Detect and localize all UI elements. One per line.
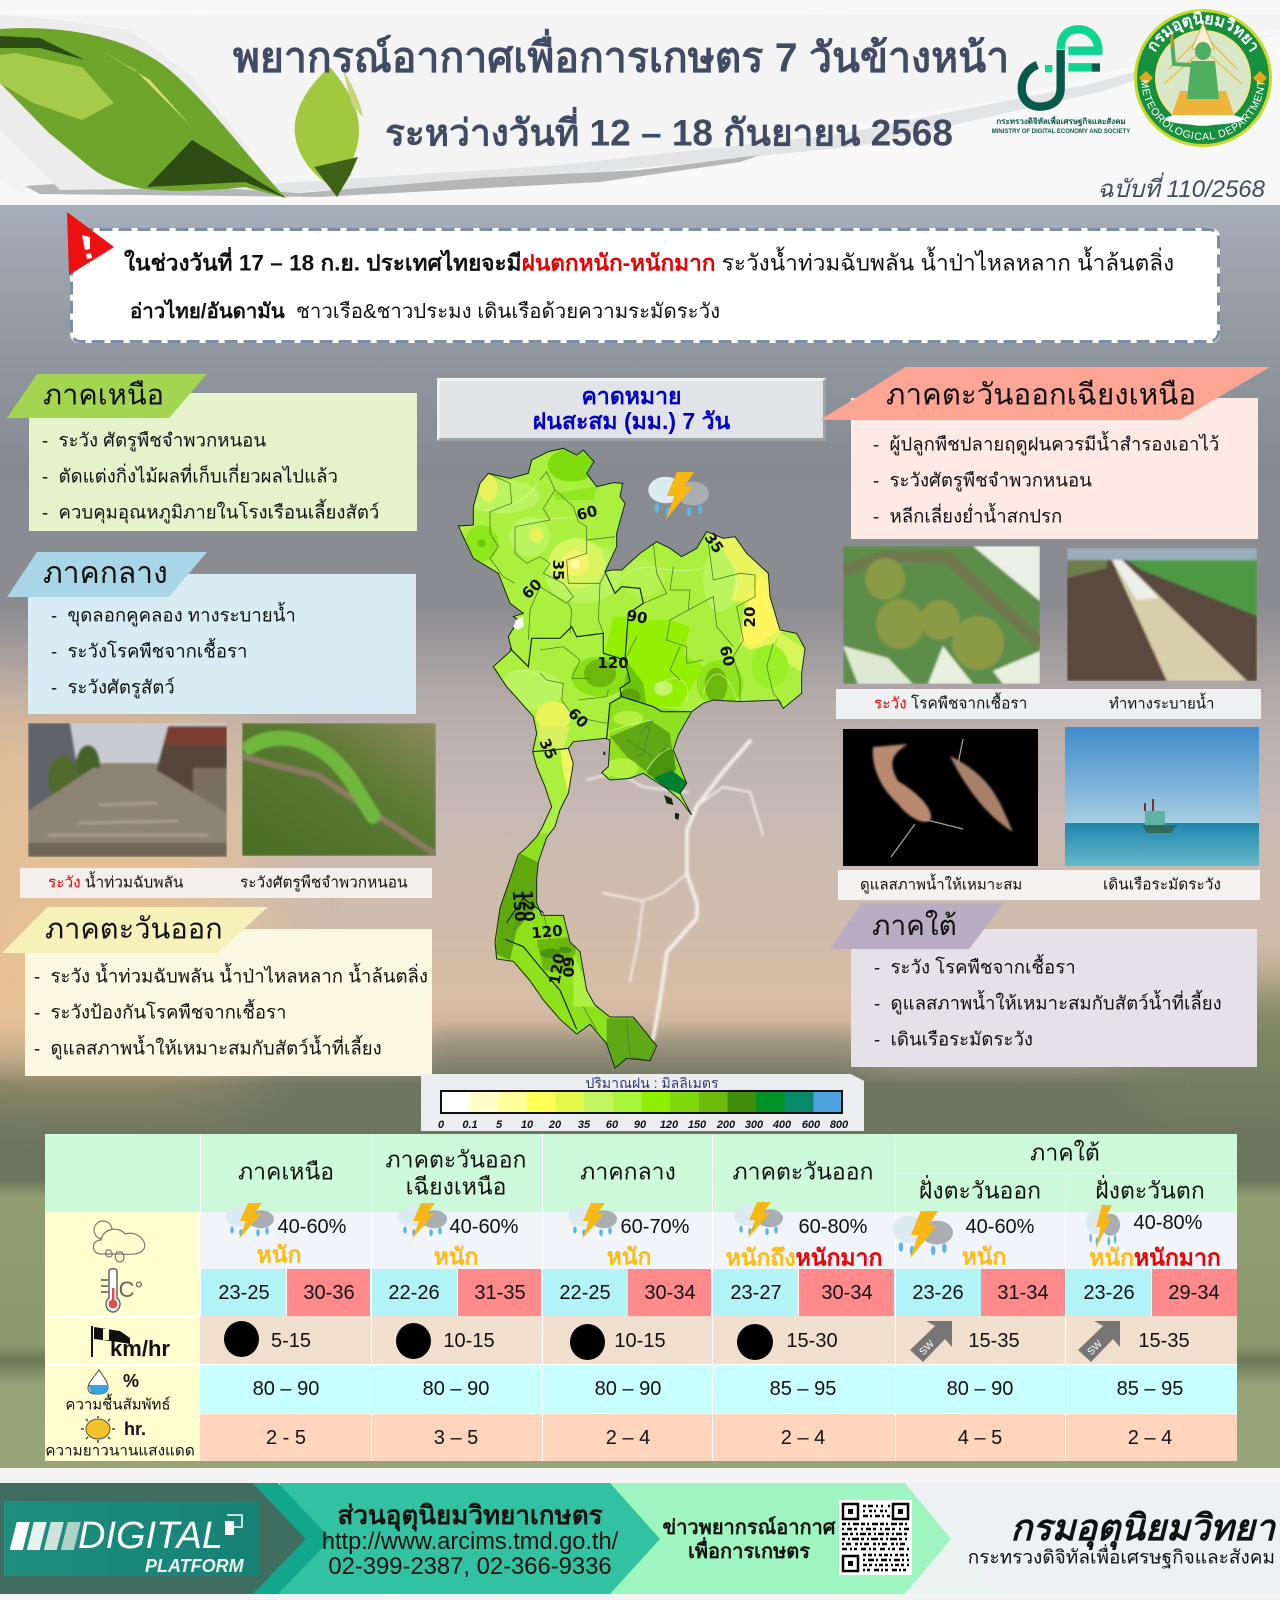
digital platform badge (4, 1501, 260, 1576)
photo: catfish (843, 729, 1038, 866)
panel: south region (851, 929, 1257, 1067)
table header row: เฉียงเหนือ (406, 1174, 506, 1200)
temperature row: 31-34 (997, 1282, 1049, 1304)
contour labels: 120 (531, 922, 563, 942)
icon: cloud sun rain outline (92, 1220, 146, 1263)
contour labels: 20 (741, 607, 759, 627)
legend scale labels: 90 (634, 1119, 647, 1131)
heading: rainfall map title (437, 378, 826, 441)
logo: ministry of digital economy: กระทรวงดิจิทัลเพื่อเศรษฐกิจและสังคม (996, 117, 1126, 126)
heading: rainfall map title: คาดหมาย (582, 383, 681, 409)
rain chance row: 60-80% (799, 1216, 867, 1238)
digital platform badge: DIGITAL (78, 1515, 223, 1557)
rain chance row (200, 1212, 1237, 1269)
wind row: 15-35 (968, 1330, 1020, 1352)
contour labels: 60 (716, 644, 738, 668)
photo: caterpillar on branch (242, 723, 436, 856)
rain chance row: 40-60% (278, 1216, 346, 1238)
temperature row: 30-34 (644, 1282, 696, 1304)
panel: northeast region (851, 398, 1258, 539)
contour labels: 60 (559, 957, 577, 977)
icon: wind sock with km/hr: km/hr (110, 1336, 170, 1361)
contour labels: 35 (701, 529, 727, 557)
heading tag: central (7, 552, 207, 597)
temperature row: 23-25 (218, 1282, 270, 1304)
humidity row: 80 – 90 (423, 1378, 489, 1400)
logo: ministry of digital economy: MINISTRY OF DIGITAL ECONOMY AND SOCIETY (992, 129, 1130, 135)
caption band: durian and drainage: ระวัง โรคพืชจากเชื้อรา (874, 695, 1027, 712)
wind row: 10-15 (443, 1330, 495, 1352)
caption band: flood and caterpillar (20, 868, 432, 898)
sunshine row: 2 – 4 (781, 1427, 825, 1449)
east advice text: - ระวัง น้ำท่วมฉับพลัน น้ำป่าไหลหลาก น้ำล้นตลิ่ง (34, 966, 428, 987)
caption band: fish and boat (838, 870, 1260, 900)
caption band: durian and drainage (836, 689, 1261, 719)
sunshine row: 3 – 5 (434, 1427, 478, 1449)
contour labels: 150 (509, 890, 529, 922)
photo: fishing boat at sea (1065, 727, 1259, 866)
panel: central region (28, 574, 416, 714)
caption band: flood and caterpillar: ระวังศัตรูพืชจำพวกหนอน (240, 874, 408, 891)
table header row: ภาคเหนือ (238, 1158, 334, 1184)
footer (0, 1468, 1280, 1600)
department name: กรมอุตุนิยมวิทยา (1010, 1507, 1275, 1548)
wind row: 15-30 (786, 1330, 838, 1352)
rain chance row: 40-60% (450, 1216, 518, 1238)
heading tag: north: ภาคเหนือ (43, 380, 164, 412)
humidity row: 85 – 95 (770, 1378, 836, 1400)
logo: ministry of digital economy (992, 25, 1130, 135)
humidity row: 80 – 90 (595, 1378, 661, 1400)
rain chance row: 60-70% (621, 1216, 689, 1238)
icon: thermometer: C° (119, 1277, 143, 1302)
forecast table (45, 1134, 1237, 1461)
east advice text: - ระวังป้องกันโรคพืชจากเชื้อรา (34, 1002, 286, 1023)
wind row: SW (918, 1338, 937, 1358)
legend scale labels: 10 (521, 1119, 534, 1131)
east advice text (34, 962, 428, 1060)
central advice text: - ระวังโรคพืชจากเชื้อรา (51, 641, 247, 662)
temperature row: 22-26 (388, 1282, 440, 1304)
legend title: ปริมาณฝน : มิลลิเมตร (586, 1075, 718, 1091)
heading tag: east: ภาคตะวันออก (45, 914, 223, 946)
temperature row (201, 1269, 1237, 1316)
table header row: ภาคกลาง (580, 1158, 676, 1184)
legend scale labels: 20 (548, 1119, 562, 1131)
sunshine row: 4 – 5 (958, 1427, 1002, 1449)
table header row: ภาคใต้ (1030, 1140, 1100, 1166)
logo: meteorological department seal: กรมอุตุนิยมวิทยา (1148, 11, 1257, 52)
icon: humidity drop label: ความชื้นสัมพัทธ์ (65, 1396, 171, 1414)
legend scale labels: 300 (745, 1119, 764, 1131)
icon: wind sock with km/hr (91, 1326, 170, 1361)
division name and contacts: 02-399-2387, 02-366-9336 (328, 1553, 612, 1580)
east advice text: - ดูแลสภาพน้ำให้เหมาะสมกับสัตว์น้ำที่เลี้ยง (34, 1038, 382, 1059)
heading tag: south: ภาคใต้ (872, 910, 957, 941)
contour labels: 120 (597, 654, 629, 672)
contour labels: 60 (564, 704, 592, 732)
photo: drainage ditch (1067, 548, 1257, 681)
table header row (45, 1134, 1237, 1212)
legend scale labels: 200 (716, 1119, 736, 1131)
central advice text: - ระวังศัตรูสัตว์ (51, 677, 175, 698)
logo: meteorological department seal: METEOROLOGICAL DEPARTMENT (1141, 80, 1265, 140)
south advice text: - ระวัง โรคพืชจากเชื้อรา (874, 957, 1076, 978)
legend scale labels: 150 (688, 1119, 707, 1131)
temperature row: 30-36 (303, 1282, 355, 1304)
division name and contacts: ส่วนอุตุนิยมวิทยาเกษตร (337, 1500, 603, 1530)
caption band: durian and drainage: ทำทางระบายน้ำ (1109, 696, 1214, 712)
table header row: ภาคตะวันออก (386, 1146, 526, 1172)
table header row: ฝั่งตะวันออก (919, 1178, 1041, 1204)
photo: durian fruit (843, 546, 1040, 684)
contour labels (509, 502, 759, 986)
icon: sunshine duration label: ความยาวนานแสงแดด (45, 1442, 195, 1459)
agro weather news label: เพื่อการเกษตร (688, 1541, 810, 1563)
rain chance row: หนัก (434, 1244, 478, 1270)
sunshine row (200, 1414, 1237, 1461)
wind row (200, 1316, 1237, 1364)
agro weather news label (663, 1516, 836, 1563)
rain chance row: หนัก (962, 1244, 1006, 1270)
digital platform badge: PLATFORM (145, 1556, 244, 1576)
rain chance row: หนักถึงหนักมาก (726, 1244, 882, 1270)
temperature row: 23-26 (912, 1282, 964, 1304)
contour labels: 60 (575, 502, 599, 524)
contour labels: 90 (625, 606, 649, 628)
humidity row: 85 – 95 (1117, 1378, 1183, 1400)
northeast advice text: - หลีกเลี่ยงย่ำน้ำสกปรก (873, 506, 1062, 527)
panel: east region (25, 929, 432, 1076)
northeast advice text: - ผู้ปลูกพืชปลายฤดูฝนควรมีน้ำสำรองเอาไว้ (873, 434, 1219, 455)
contour labels: 35 (535, 736, 561, 762)
panel: north region (29, 393, 417, 531)
heading tag: northeast: ภาคตะวันออกเฉียงเหนือ (886, 378, 1196, 411)
alert box (70, 228, 1220, 343)
legend scale labels: 5 (496, 1119, 503, 1131)
footer chevron bands (0, 1483, 1000, 1594)
south advice text: - เดินเรือระมัดระวัง (874, 1029, 1033, 1050)
header banner (0, 0, 1280, 205)
legend scale labels: 800 (830, 1119, 849, 1131)
issue number: ฉบับที่ 110/2568 (1097, 176, 1265, 203)
heading tag: east (2, 907, 268, 953)
legend scale labels: 35 (578, 1119, 591, 1131)
south advice text: - ดูแลสภาพน้ำให้เหมาะสมกับสัตว์น้ำที่เลี้ยง (874, 993, 1222, 1014)
sunshine row: 2 – 4 (606, 1427, 650, 1449)
central advice text (51, 602, 296, 698)
contour labels: 60 (518, 575, 546, 603)
temperature row: 30-34 (821, 1282, 873, 1304)
icon: sunshine duration label: hr. (124, 1419, 146, 1439)
QR code (839, 1500, 912, 1575)
legend: rainfall scale (421, 1074, 864, 1131)
row label column (45, 1212, 200, 1461)
alert line 2: อ่าวไทย/อันดามัน ชาวเรือ&ชาวประมง เดินเรือด้วยความระมัดระวัง (130, 301, 720, 323)
table header row: ฝั่งตะวันตก (1095, 1178, 1205, 1204)
north advice text (42, 430, 379, 524)
rain chance row: หนัก (257, 1242, 301, 1268)
northeast advice text (873, 430, 1219, 527)
legend scale labels: 60 (606, 1119, 619, 1131)
heading tag: north (7, 374, 207, 418)
legend scale labels: 0 (438, 1119, 445, 1131)
temperature row: 31-35 (474, 1282, 526, 1304)
division name and contacts (322, 1500, 618, 1580)
heading tag: central: ภาคกลาง (43, 557, 168, 590)
rainfall map of Thailand (458, 448, 806, 1069)
contour labels: 120 (518, 890, 538, 922)
legend scale labels: 120 (660, 1119, 679, 1131)
main title: พยากรณ์อากาศเพื่อการเกษตร 7 วันข้างหน้า (233, 34, 1009, 80)
icon: thermometer (101, 1268, 143, 1313)
alert line 1: ในช่วงวันที่ 17 – 18 ก.ย. ประเทศไทยจะมีฝนตกหนัก-หนักมาก ระวังน้ำท่วมฉับพลัน น้ำป่าไหลหลาก น้ำล้นตลิ่ง (124, 251, 1174, 276)
heading tag: northeast (820, 367, 1270, 420)
rain chance row: 40-60% (966, 1216, 1034, 1238)
north advice text: - ระวัง ศัตรูพืชจำพวกหนอน (42, 430, 266, 451)
caption band: flood and caterpillar: ระวัง น้ำท่วมฉับพลัน (48, 874, 183, 891)
icon: humidity drop label: % (123, 1371, 139, 1391)
northeast advice text: - ระวังศัตรูพืชจำพวกหนอน (873, 470, 1092, 491)
temperature row: 22-25 (559, 1282, 611, 1304)
legend scale labels: 0.1 (462, 1119, 478, 1131)
division name and contacts: http://www.arcims.tmd.go.th/ (322, 1529, 618, 1555)
table header row: ภาคตะวันออก (733, 1158, 873, 1184)
caption band: fish and boat: ดูแลสภาพน้ำให้เหมาะสม (860, 876, 1022, 894)
sunshine row: 2 - 5 (266, 1427, 306, 1449)
logo: meteorological department seal (1134, 9, 1272, 147)
sunshine row: 2 – 4 (1128, 1427, 1172, 1449)
agro weather news label: ข่าวพยากรณ์อากาศ (663, 1517, 835, 1539)
photo: flooded street (28, 723, 227, 857)
ministry name: กระทรวงดิจิทัลเพื่อเศรษฐกิจและสังคม (968, 1548, 1275, 1568)
central advice text: - ขุดลอกคูคลอง ทางระบายน้ำ (51, 605, 296, 626)
wind row: 5-15 (271, 1330, 311, 1352)
icon: humidity drop label (65, 1369, 171, 1414)
contour labels: 35 (549, 560, 567, 580)
wind row: 15-35 (1138, 1330, 1190, 1352)
heading: rainfall map title: ฝนสะสม (มม.) 7 วัน (533, 408, 730, 434)
contour labels: 120 (545, 952, 569, 986)
north advice text: - ตัดแต่งกิ่งไม้ผลที่เก็บเกี่ยวผลไปแล้ว (42, 466, 338, 487)
rain chance row: 40-80% (1134, 1212, 1202, 1234)
date subtitle: ระหว่างวันที่ 12 – 18 กันยายน 2568 (385, 112, 953, 154)
rain chance row: หนัก (607, 1244, 651, 1270)
south advice text (874, 954, 1222, 1050)
temperature row: 29-34 (1168, 1282, 1220, 1304)
caption band: fish and boat: เดินเรือระมัดระวัง (1103, 876, 1221, 893)
rain chance row: หนักหนักมาก (1089, 1244, 1221, 1270)
wind row: 10-15 (614, 1330, 666, 1352)
icon: storm cloud by map (648, 472, 709, 520)
icon: sunshine duration label (45, 1416, 195, 1459)
heading tag: south (830, 903, 1004, 949)
humidity row (200, 1365, 1237, 1413)
humidity row: 80 – 90 (947, 1378, 1013, 1400)
header swoosh and leaves (0, 15, 1276, 198)
wind row: SW (1086, 1338, 1105, 1358)
legend colour bar (440, 1090, 843, 1114)
temperature row: 23-26 (1083, 1282, 1135, 1304)
legend scale labels: 600 (802, 1119, 821, 1131)
humidity row: 80 – 90 (253, 1378, 319, 1400)
temperature row: 23-27 (730, 1282, 782, 1304)
legend scale labels (438, 1120, 848, 1128)
north advice text: - ควบคุมอุณหภูมิภายในโรงเรือนเลี้ยงสัตว์ (42, 502, 379, 523)
legend scale labels: 400 (772, 1119, 792, 1131)
icon: red warning flag (67, 212, 114, 275)
